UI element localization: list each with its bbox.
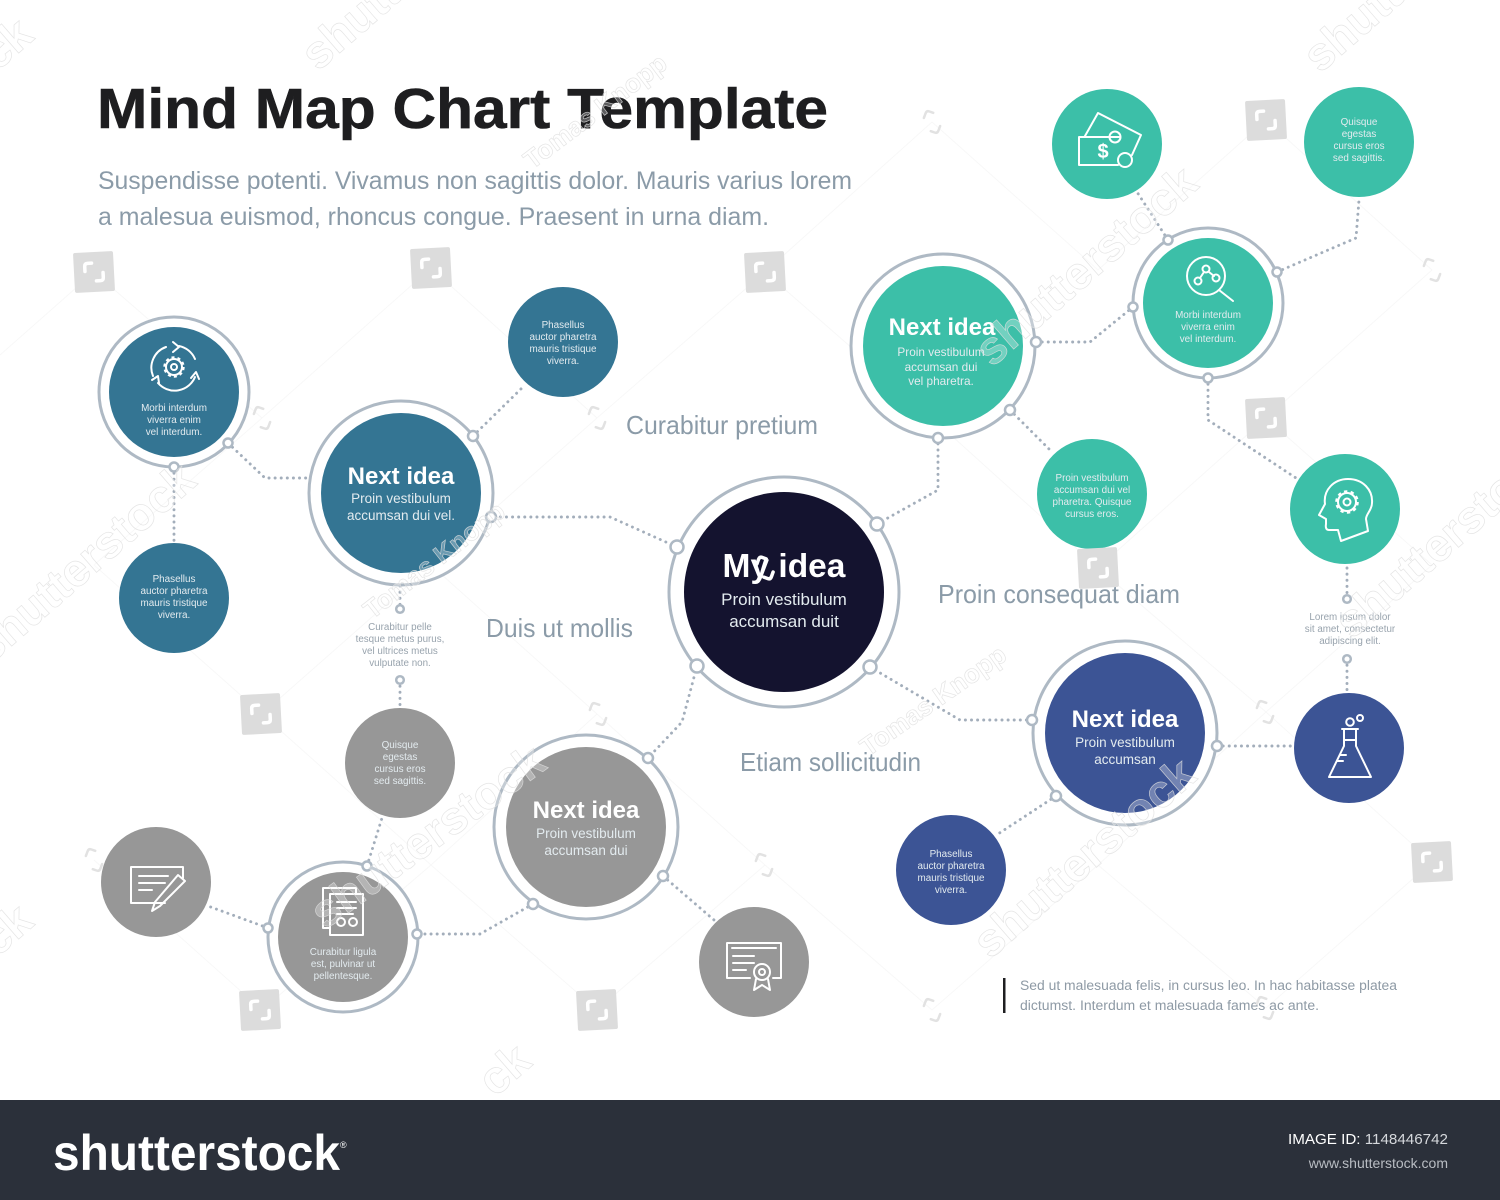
footer bar: [0, 1100, 1500, 1200]
gray node: Quisque: Quisque: [382, 740, 419, 751]
watermark overlay: Tomas Knopp: [854, 639, 1012, 762]
footer registered mark: ®: [340, 1140, 347, 1150]
label: Etiam sollicitudin: Etiam sollicitudin: [740, 747, 921, 777]
label: Proin consequat diam: Proin consequat diam: [938, 579, 1180, 609]
green node: Proin vestibulum: cursus eros.: [1065, 509, 1119, 520]
watermark overlay: shutterstock: [962, 747, 1205, 968]
green node: money icon: $: [1097, 141, 1109, 163]
green node: money icon: [1052, 89, 1162, 199]
subtitle: Suspendisse potenti. Vivamus non sagittis dolor. Mauris varius lorem: [98, 167, 852, 195]
blue branch: Next idea: accumsan dui vel.: [347, 508, 455, 523]
gray branch: Next idea: [494, 735, 678, 919]
central node: My idea: [669, 477, 899, 707]
label: Duis ut mollis: Duis ut mollis: [486, 613, 633, 643]
connector lines: [174, 192, 1359, 934]
icon: magnifier graph: [1187, 257, 1233, 301]
caption: Curabitur pelle: tesque metus purus,: [356, 634, 444, 645]
blue branch: Next idea: [309, 401, 496, 585]
caption: Lorem ipsum: [1305, 595, 1396, 663]
blue branch: Next idea: Proin vestibulum: [351, 491, 451, 506]
watermark overlay: shutterstock: [300, 734, 555, 938]
green node: Proin vestibulum: pharetra. Quisque: [1052, 497, 1132, 508]
icon: cycle gear: [151, 342, 199, 391]
central node: My idea: accumsan duit: [729, 612, 839, 631]
caption: Curabitur pelle: [356, 605, 444, 684]
watermark overlay: Tomas Knopp: [357, 496, 511, 625]
blue node: Phasellus upper: auctor pharetra: [530, 332, 597, 343]
footer url: www.shutterstock.com: [1308, 1155, 1448, 1171]
gray node: documents: Curabitur ligula: [310, 947, 377, 958]
watermark overlay: Tomas Knopp: [518, 48, 673, 175]
footnote: dictumst. Interdum et malesuada fames ac ante.: [1020, 998, 1319, 1013]
gray node: documents: pellentesque.: [314, 971, 372, 982]
green node: analysis: viverra enim: [1181, 322, 1235, 333]
icon: documents: [323, 888, 363, 935]
footnote: [1003, 978, 1397, 1013]
subtitle: [98, 167, 852, 231]
green branch: Next idea: [851, 254, 1041, 443]
gray node: certificate icon: [699, 907, 809, 1017]
indigo branch: Next idea: [1027, 641, 1222, 825]
green branch: Next idea: accumsan dui: [905, 360, 977, 374]
blue node: Phasellus upper: [508, 287, 618, 397]
indigo branch: Next idea: accumsan: [1094, 752, 1156, 767]
blue node: Phasellus upper: mauris tristique: [530, 344, 597, 355]
green node: Quisque: Quisque: [1341, 117, 1378, 128]
subtitle: a malesua euismod, rhoncus congue. Praesent in urna diam.: [98, 203, 769, 231]
green node: Quisque: sed sagittis.: [1333, 153, 1385, 164]
green branch: Next idea: vel pharetra.: [908, 374, 974, 388]
indigo node: Phasellus: auctor pharetra: [918, 861, 985, 872]
blue node: Morbi interdum with gear icon: viverra enim: [147, 415, 201, 426]
green node: analysis: vel interdum.: [1180, 334, 1236, 345]
indigo node: flask icon: [1294, 693, 1404, 803]
green node: Proin vestibulum: Proin vestibulum: [1056, 473, 1128, 484]
gray node: Quisque: [345, 708, 455, 818]
blue node: Phasellus lower: mauris tristique: [141, 598, 208, 609]
indigo node: Phasellus: mauris tristique: [918, 873, 985, 884]
gray node: documents: [264, 862, 422, 1012]
gray node: documents: est, pulvinar ut: [311, 959, 375, 970]
green node: Quisque: cursus eros: [1333, 141, 1385, 152]
indigo node: Phasellus: Phasellus: [930, 849, 972, 860]
green node: Proin vestibulum: accumsan dui vel: [1054, 485, 1130, 496]
indigo node: Phasellus: viverra.: [935, 885, 967, 896]
label: Curabitur pretium: Curabitur pretium: [626, 410, 818, 440]
caption: Lorem ipsum: Lorem ipsum dolor: [1309, 612, 1391, 623]
watermark overlay: ck: [467, 1032, 540, 1106]
gray node: pencil icon: [101, 827, 211, 937]
caption: Curabitur pelle: vel ultrices metus: [362, 646, 438, 657]
green branch: Next idea: Proin vestibulum: [897, 345, 985, 359]
blue node: Phasellus lower: auctor pharetra: [141, 586, 208, 597]
gray node: Quisque: egestas: [383, 752, 417, 763]
title: Mind Map Chart Template: [97, 77, 828, 141]
blue node: Phasellus lower: Phasellus: [153, 574, 195, 585]
caption: Lorem ipsum: sit amet, consectetur: [1305, 624, 1396, 635]
watermark overlay: shutterstock: [964, 155, 1207, 376]
footer image id: IMAGE ID: 1148446742: [1288, 1131, 1448, 1148]
green node: analysis: [1128, 228, 1283, 382]
gray node: Quisque: sed sagittis.: [374, 776, 426, 787]
green branch: Next idea: Next idea: [889, 314, 996, 341]
footnote: Sed ut malesuada felis, in cursus leo. In hac habitasse platea: [1020, 978, 1397, 993]
green node: head gear icon: [1290, 454, 1400, 564]
green node: Quisque: [1304, 87, 1414, 197]
blue branch: Next idea: Next idea: [348, 463, 455, 490]
caption: Lorem ipsum: adipiscing elit.: [1319, 636, 1381, 647]
central node: My idea: My idea: [723, 548, 846, 585]
caption: Curabitur pelle: vulputate non.: [369, 658, 431, 669]
indigo branch: Next idea: Proin vestibulum: [1075, 735, 1175, 750]
blue node: Phasellus lower: viverra.: [158, 610, 190, 621]
green node: Quisque: egestas: [1342, 129, 1376, 140]
blue node: Phasellus upper: viverra.: [547, 356, 579, 367]
gray branch: Next idea: Proin vestibulum: [536, 826, 636, 841]
indigo branch: Next idea: Next idea: [1072, 706, 1179, 733]
blue node: Phasellus upper: Phasellus: [542, 320, 584, 331]
green node: analysis: Morbi interdum: [1175, 310, 1241, 321]
blue node: Morbi interdum with gear icon: vel interdum.: [146, 427, 202, 438]
indigo node: Phasellus: [896, 815, 1006, 925]
blue node: Morbi interdum with gear icon: Morbi interdum: [141, 403, 207, 414]
blue node: Phasellus lower: [119, 543, 229, 653]
blue node: Morbi interdum with gear icon: [99, 317, 249, 472]
caption: Curabitur pelle: Curabitur pelle: [368, 622, 432, 633]
footer logo: shutterstock: [53, 1125, 340, 1181]
central node: My idea: Proin vestibulum: [721, 590, 847, 609]
gray branch: Next idea: accumsan dui: [544, 843, 628, 858]
gray node: Quisque: cursus eros: [374, 764, 426, 775]
green node: Proin vestibulum: [1037, 439, 1147, 549]
gray branch: Next idea: Next idea: [533, 797, 640, 824]
